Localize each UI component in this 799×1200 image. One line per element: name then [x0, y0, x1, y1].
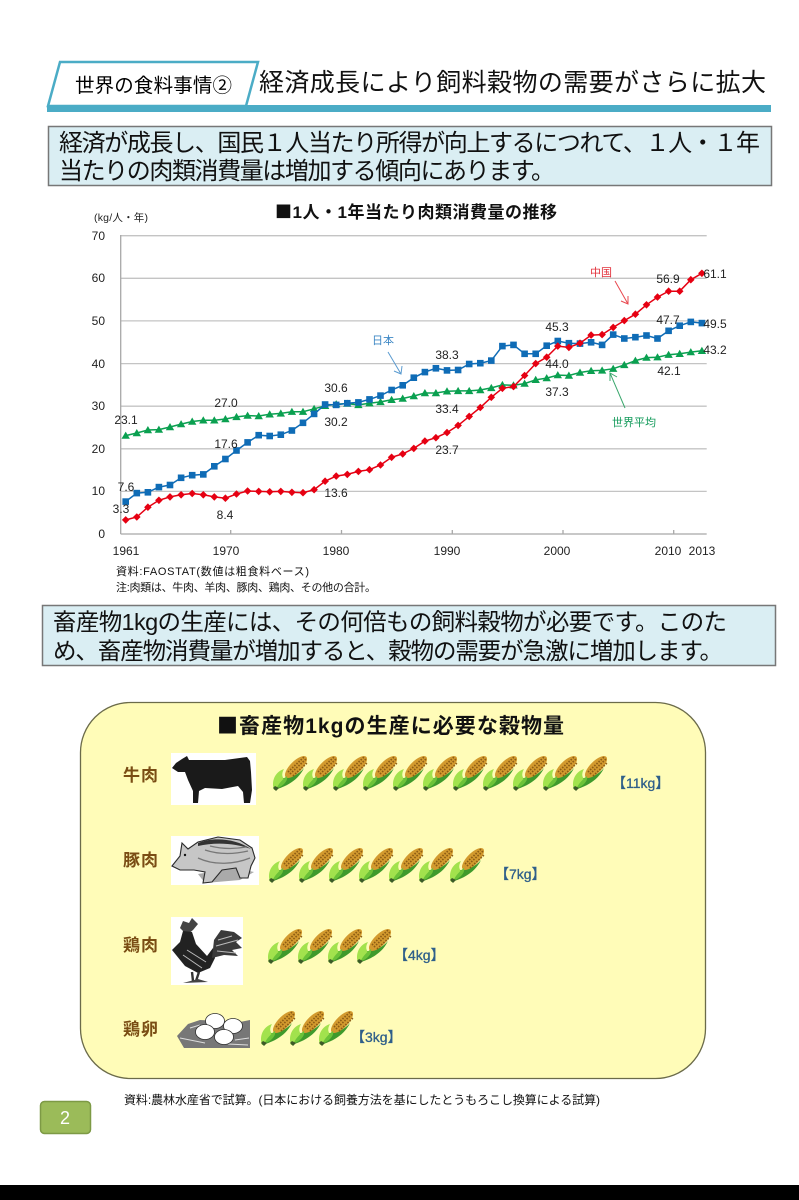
icon: pig [171, 836, 259, 885]
row: beef [123, 753, 669, 805]
title: 経済成長により飼料穀物の需要がさらに拡大 [259, 69, 766, 97]
x axis labels: 2013 [689, 544, 716, 558]
data labels: 17.6 [214, 437, 238, 451]
y axis labels: 60 [92, 271, 105, 285]
data labels: 13.6 [324, 486, 348, 500]
data labels: 3.3 [113, 502, 130, 516]
x axis labels: 1980 [323, 544, 350, 558]
series: world average [126, 351, 702, 436]
chart notes [116, 564, 376, 594]
data labels: 27.0 [214, 396, 238, 410]
data labels: 7.6 [118, 480, 135, 494]
source note: 資料:農林水産省で試算。(日本における飼養方法を基にしたとうもろこし換算による試算) [124, 1092, 600, 1107]
row: chicken: 【4kg】 [394, 947, 445, 963]
explanation text box: め、畜産物消費量が増加すると、穀物の需要が急激に増加します。 [53, 638, 723, 664]
section tab: 世界の食料事情② [75, 75, 232, 97]
data labels: 33.4 [435, 402, 459, 416]
header bar [47, 105, 771, 112]
row: chicken: 鶏肉 [123, 936, 158, 955]
data labels: 61.1 [703, 267, 727, 281]
chart notes: 資料:FAOSTAT(数値は粗食料ベース) [116, 564, 309, 578]
header [47, 62, 771, 112]
data labels: 43.2 [703, 343, 727, 357]
corn icons: 3 [261, 1008, 356, 1046]
icon: cow [171, 753, 256, 805]
data labels: 47.7 [656, 313, 680, 327]
bottom black band [0, 1185, 799, 1200]
y axis labels: 10 [92, 484, 105, 498]
y axis labels [92, 229, 105, 541]
series label: China [590, 266, 628, 304]
chart notes: 注:肉類は、牛肉、羊肉、豚肉、鶏肉、その他の合計。 [116, 580, 376, 594]
row: pork: 【7kg】 [495, 866, 546, 882]
series label: Japan: 日本 [372, 333, 394, 347]
corn icons: 7 [269, 845, 487, 883]
y axis labels: 20 [92, 442, 105, 456]
data labels: 38.3 [435, 348, 459, 362]
x axis labels: 2000 [544, 544, 571, 558]
row: chicken [123, 917, 445, 985]
row: eggs [123, 1008, 402, 1048]
data labels: 56.9 [656, 272, 680, 286]
row: pork [123, 836, 546, 885]
row: pork: 豚肉 [123, 851, 158, 870]
series label: world average [610, 373, 656, 429]
panel: grain required per 1kg of livestock product [80, 702, 706, 1078]
icon: rooster [171, 917, 243, 985]
data labels: 23.1 [114, 413, 138, 427]
data labels: 30.6 [324, 381, 348, 395]
explanation text box: 畜産物1kgの生産には、その何倍もの飼料穀物が必要です。このた [53, 609, 727, 635]
x axis labels: 1961 [113, 544, 140, 558]
data labels: 44.0 [545, 357, 569, 371]
data labels: 42.1 [657, 364, 681, 378]
corn icons: 11 [273, 753, 610, 791]
row: beef: 牛肉 [123, 766, 158, 785]
y axis labels: 30 [92, 399, 105, 413]
data labels: 37.3 [545, 385, 569, 399]
data labels: 8.4 [217, 508, 234, 522]
icon: eggs in nest [177, 1014, 250, 1048]
page number badge: 2 [60, 1108, 70, 1128]
row: beef: 【11kg】 [612, 775, 669, 791]
series label: Japan [372, 333, 402, 374]
section tab [48, 62, 258, 106]
x axis labels: 2010 [655, 544, 682, 558]
chart title: ■1人・1年当たり肉類消費量の推移 [275, 198, 557, 223]
row: eggs: 【3kg】 [351, 1029, 402, 1045]
x axis labels: 1990 [434, 544, 461, 558]
y axis labels: 40 [92, 357, 105, 371]
y axis labels: 50 [92, 314, 105, 328]
data labels: 23.7 [435, 443, 459, 457]
series label: world average: 世界平均 [612, 415, 656, 429]
y axis labels: 70 [92, 229, 105, 243]
page number badge [40, 1102, 90, 1134]
data labels: 45.3 [545, 320, 569, 334]
row: eggs: 鶏卵 [123, 1020, 158, 1039]
y axis unit: (kg/人・年) [94, 211, 148, 224]
series label: China: 中国 [590, 266, 612, 279]
intro text box: 経済が成長し、国民１人当たり所得が向上するにつれて、１人・１年 [59, 130, 760, 157]
panel heading: ■畜産物1kgの生産に必要な穀物量 [217, 710, 564, 740]
explanation text box [42, 606, 776, 666]
corn icons: 4 [268, 926, 394, 964]
x axis labels: 1970 [213, 544, 240, 558]
intro text box [48, 126, 772, 186]
line chart: meat consumption per capita [92, 198, 727, 594]
series: Japan [126, 322, 702, 502]
data labels: 30.2 [324, 415, 348, 429]
intro text box: 当たりの肉類消費量は増加する傾向にあります。 [59, 158, 555, 185]
x axis labels [113, 544, 716, 558]
y axis labels: 0 [98, 527, 105, 541]
series: China [126, 273, 702, 520]
data labels [113, 267, 727, 522]
data labels: 49.5 [703, 317, 727, 331]
